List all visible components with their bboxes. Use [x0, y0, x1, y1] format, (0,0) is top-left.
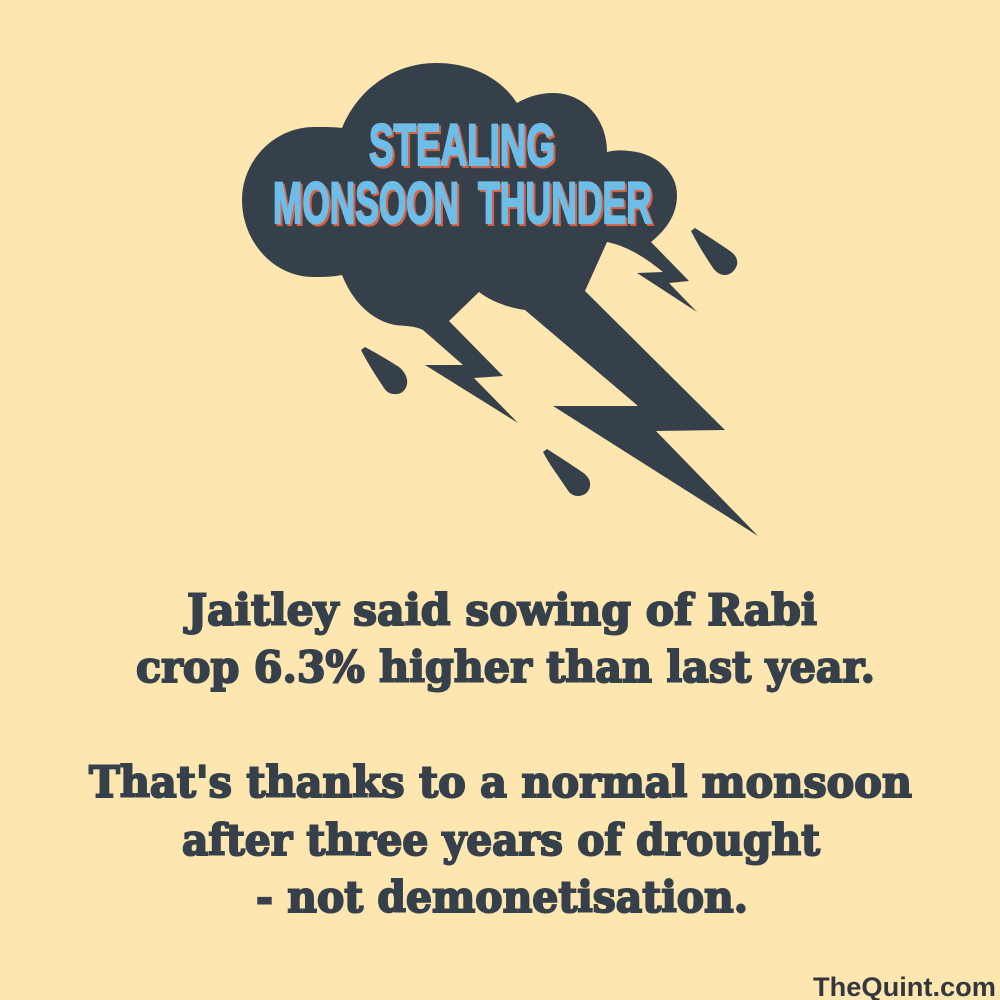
title: THUNDER — [480, 173, 654, 238]
text block: Rabi sowing statement — [136, 586, 875, 693]
text block: monsoon explanation: That's thanks to a normal monsoon — [89, 758, 912, 808]
icon: rain drop left — [361, 347, 407, 394]
text block: Rabi sowing statement: crop 6.3% higher than last year. — [136, 643, 875, 693]
icon: cloud with lightning bolts — [242, 63, 758, 536]
text block: monsoon explanation: after three years of drought — [182, 816, 820, 866]
text block: monsoon explanation — [89, 758, 912, 923]
icon: rain drop centre — [543, 449, 590, 496]
title: MONSOON — [273, 171, 459, 236]
title: THUNDER — [478, 171, 652, 236]
icon: rain drop right — [691, 228, 737, 275]
title: STEALING — [371, 115, 557, 180]
title: STEALING — [369, 113, 555, 178]
text block: monsoon explanation: - not demonetisation. — [256, 873, 748, 923]
illustration: storm cloud with lightning and rain — [242, 63, 758, 536]
title — [273, 113, 654, 238]
title: MONSOON — [275, 173, 461, 238]
text block: Rabi sowing statement: Jaitley said sowing of Rabi — [183, 586, 817, 636]
